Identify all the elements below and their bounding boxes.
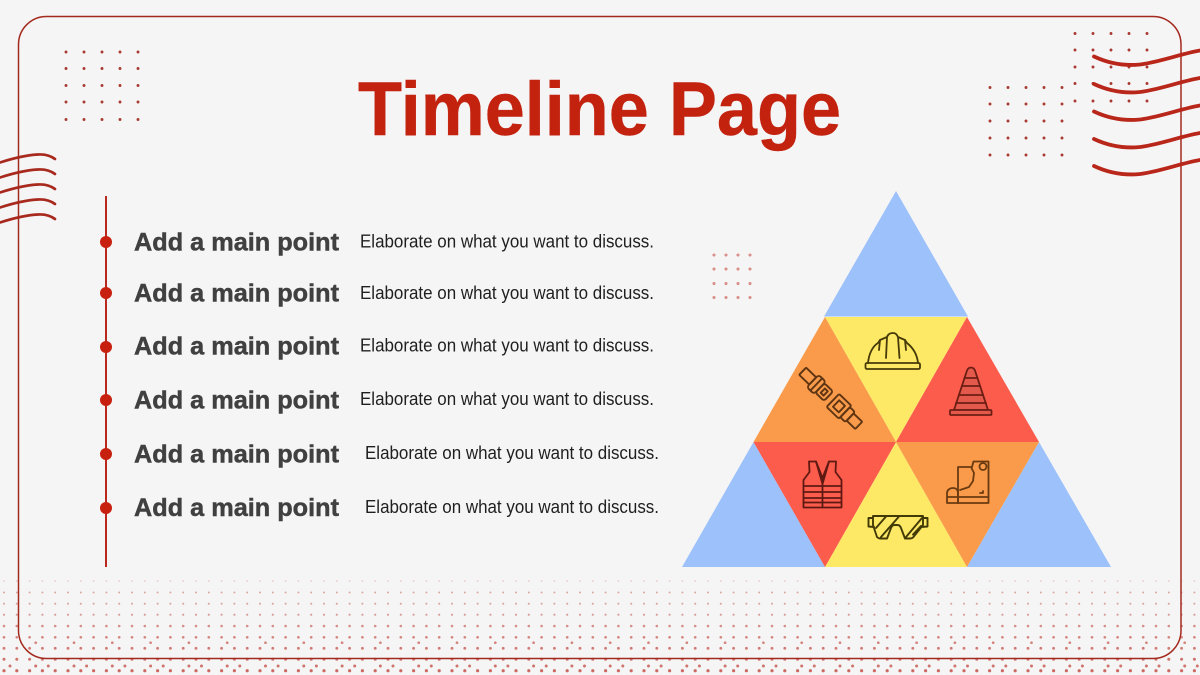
timeline row 4: Add a main point — [134, 387, 340, 415]
icon: hard hat — [866, 333, 920, 369]
timeline row 5: Add a main point — [134, 441, 340, 469]
halftone dot band — [4, 581, 1200, 671]
timeline row 6 — [134, 494, 659, 522]
title: Timeline Page — [358, 67, 841, 152]
icon: safety goggles — [868, 516, 928, 538]
wavy lines: left — [0, 154, 55, 222]
timeline — [100, 196, 112, 567]
dot grid: pale centre — [714, 255, 752, 298]
timeline row 1: Add a main point — [134, 228, 340, 256]
icon: traffic cone — [950, 368, 992, 415]
dot grid: upper right middle — [990, 88, 1064, 155]
pyramid: blue corners — [682, 191, 1111, 567]
timeline row 2: Elaborate on what you want to discuss. — [360, 282, 654, 303]
timeline row 4 — [134, 387, 654, 415]
pyramid: yellow triangles — [825, 317, 967, 567]
timeline row 1: Elaborate on what you want to discuss. — [360, 231, 654, 252]
dot grid: top left — [66, 52, 140, 120]
timeline row 2: Add a main point — [134, 280, 340, 308]
timeline row 6: Elaborate on what you want to discuss. — [365, 496, 659, 517]
dot grid: top right — [1075, 34, 1149, 101]
wavy lines: top right — [1094, 50, 1200, 174]
timeline row 3: Elaborate on what you want to discuss. — [360, 335, 654, 356]
timeline row 3 — [134, 333, 654, 361]
icon: safety belt — [796, 365, 865, 432]
pyramid: red triangles — [754, 317, 1039, 567]
timeline row 4: Elaborate on what you want to discuss. — [360, 388, 654, 409]
icon: work boots — [947, 462, 988, 503]
timeline row 5: Elaborate on what you want to discuss. — [365, 442, 659, 463]
icon: safety vest — [804, 462, 842, 508]
timeline row 2 — [134, 280, 654, 308]
timeline axis — [105, 196, 107, 567]
timeline row 5 — [134, 441, 659, 469]
triangle pyramid — [682, 191, 1111, 567]
timeline row 6: Add a main point — [134, 494, 340, 522]
timeline row 1 — [134, 228, 654, 256]
pyramid: orange triangles — [754, 317, 1039, 567]
timeline row 3: Add a main point — [134, 333, 340, 361]
timeline markers — [100, 236, 112, 514]
